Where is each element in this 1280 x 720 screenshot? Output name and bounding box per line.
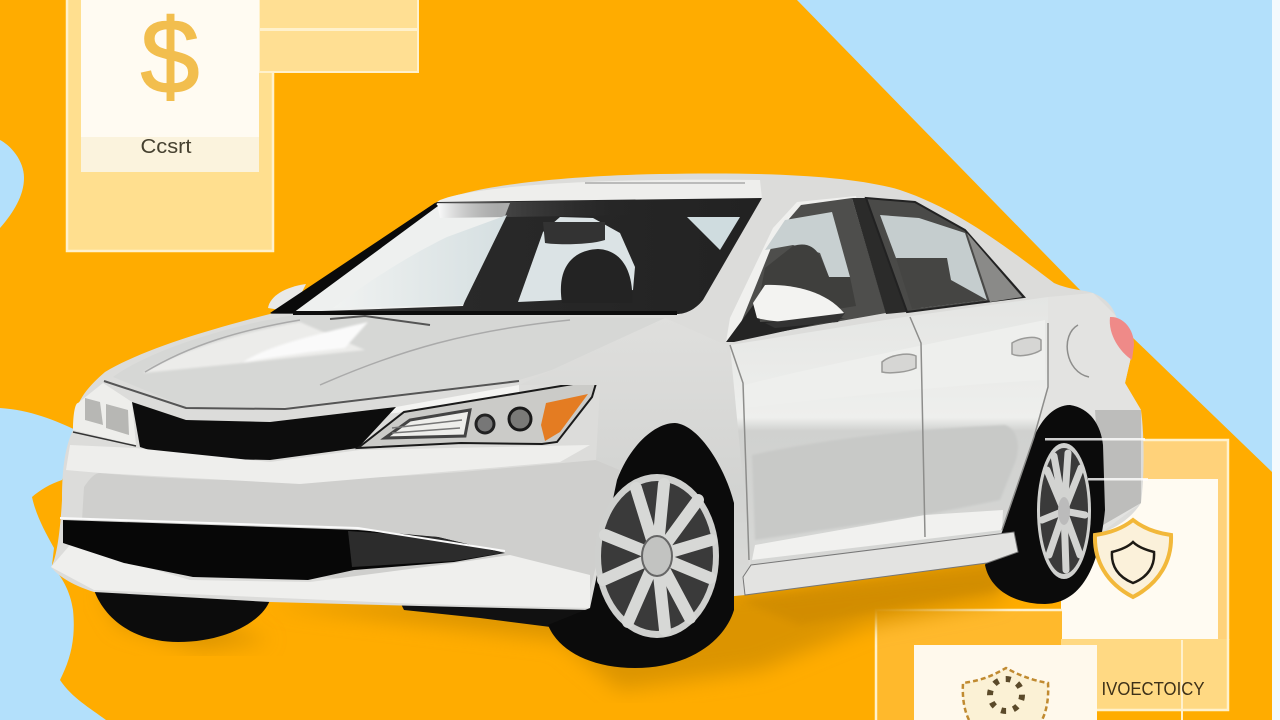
- bumper lower light: [51, 545, 590, 608]
- front fender: [519, 318, 749, 608]
- roof line: [585, 182, 745, 184]
- ground shadow: [100, 560, 1020, 690]
- cost side card: [259, 0, 418, 72]
- roof highlight: [437, 180, 762, 202]
- lower grille: [63, 520, 505, 580]
- rear wheel: [1037, 443, 1091, 579]
- bumper gray band: [82, 460, 620, 595]
- panel: cost: [67, 0, 418, 251]
- window pillar: [852, 198, 907, 314]
- bumper edge line: [60, 518, 505, 551]
- far mirror: [268, 284, 306, 312]
- policy border: [876, 610, 1228, 720]
- car: [51, 173, 1144, 668]
- tail light: [1110, 317, 1134, 360]
- side card divider: [259, 28, 418, 31]
- hood: [113, 314, 665, 407]
- cost outer card: [67, 0, 273, 251]
- front wheel: [548, 423, 734, 668]
- door white reflection: [745, 320, 1045, 408]
- shield card white panel: [1061, 479, 1218, 639]
- mirror: [726, 285, 845, 342]
- hood crease: [145, 320, 570, 385]
- rear lower gray: [1095, 410, 1141, 525]
- left headlight: [73, 383, 136, 446]
- icon: dollar sign: $: [141, 0, 199, 116]
- rocker: [743, 532, 1018, 595]
- far front tire: [94, 590, 270, 642]
- door seams: [730, 317, 1089, 560]
- policy label: IVOECTOICY: [1102, 679, 1204, 699]
- panel: shield card: [1061, 440, 1228, 640]
- policy white panel: [914, 645, 1097, 720]
- door handle front: [882, 354, 916, 373]
- card outline over car, lower: [1088, 478, 1148, 480]
- door light strip: [752, 510, 1003, 560]
- blue area bottom left: [0, 408, 106, 720]
- right edge strip: [1272, 0, 1280, 720]
- body silhouette: [51, 173, 1144, 610]
- right headlight: [358, 380, 597, 448]
- hood chrome strip: [104, 381, 519, 409]
- shield card border: [1143, 440, 1228, 640]
- windshield: [270, 198, 762, 325]
- hood highlight: [143, 322, 365, 373]
- doors: [730, 297, 1048, 565]
- policy backing: [876, 610, 1062, 720]
- grille: [132, 402, 396, 460]
- rear quarter: [1034, 293, 1141, 533]
- panel: policy: [876, 610, 1228, 720]
- icon: shield: [1095, 520, 1171, 597]
- cost label: Ccsrt: [140, 136, 192, 158]
- blue corner area top right: [797, 0, 1272, 472]
- rear side window: [866, 198, 1024, 312]
- rear wheel arch and tire: [985, 405, 1105, 604]
- underbody: [400, 600, 590, 632]
- shield card backing: [1143, 440, 1228, 640]
- fog lamp area: [348, 531, 503, 567]
- door handle rear: [1012, 337, 1041, 356]
- card outline over car, upper: [1045, 438, 1145, 440]
- door lower reflection: [752, 425, 1018, 540]
- blue blob left: [0, 140, 24, 228]
- hood highlight center: [243, 322, 368, 362]
- policy divider: [1181, 640, 1183, 720]
- policy backing right: [1061, 639, 1228, 710]
- bumper light band: [66, 445, 590, 484]
- hood lip: [132, 385, 519, 424]
- cost inner white card: [81, 0, 259, 137]
- icon: policy shield: [963, 668, 1048, 720]
- front side window: [726, 196, 886, 342]
- cost label band: [81, 137, 259, 172]
